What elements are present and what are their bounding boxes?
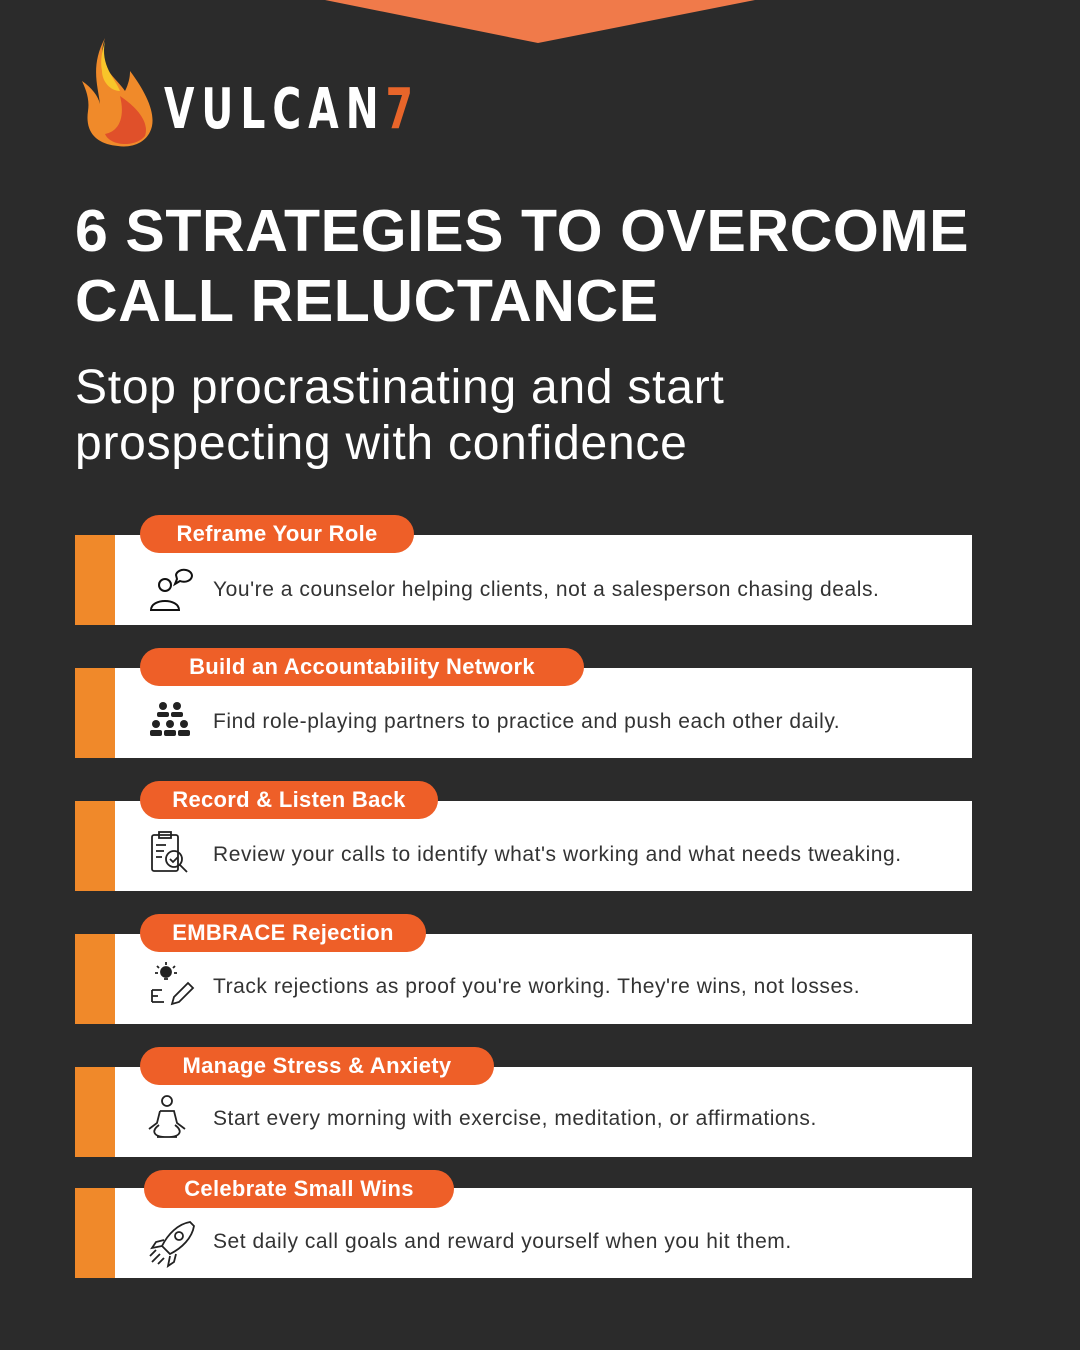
pill title: Record & Listen Back: [172, 787, 406, 812]
icon: rocket: [149, 1221, 195, 1268]
pill title: Build an Accountability Network: [189, 654, 535, 679]
title: [75, 198, 969, 334]
pill title: Celebrate Small Wins: [184, 1176, 414, 1201]
panel: network: [75, 648, 972, 758]
pill title: [140, 914, 426, 952]
pill title: Manage Stress & Anxiety: [183, 1053, 451, 1078]
logo text: VULCAN7: [164, 77, 420, 142]
text: Review your calls to identify what's working and what needs tweaking.: [213, 843, 902, 866]
text: Find role-playing partners to practice and push each other daily.: [213, 710, 840, 733]
icon: person speech: [150, 568, 193, 611]
pill title: Reframe Your Role: [176, 521, 378, 546]
icon: group: [150, 702, 190, 736]
text: You're a counselor helping clients, not a salesperson chasing deals.: [213, 578, 879, 601]
icon: clipboard search: [151, 831, 188, 873]
pill title: [140, 781, 438, 819]
panel: reframe: [75, 515, 972, 625]
panel: rejection: [75, 914, 972, 1024]
icon: idea pencil: [151, 962, 194, 1006]
title: 6 STRATEGIES TO OVERCOME: [75, 198, 969, 264]
text: Track rejections as proof you're working. They're wins, not losses.: [213, 975, 860, 998]
pill title: [140, 648, 584, 686]
pill title: [140, 1047, 494, 1085]
text: Start every morning with exercise, meditation, or affirmations.: [213, 1107, 817, 1130]
pill title: EMBRACE Rejection: [172, 920, 394, 945]
subtitle: Stop procrastinating and start: [75, 361, 725, 414]
title: CALL RELUCTANCE: [75, 268, 659, 334]
panel: record: [75, 781, 972, 891]
icon: flame: [82, 38, 152, 146]
pill title: [144, 1170, 454, 1208]
panel: wins: [75, 1170, 972, 1278]
top banner: [325, 0, 755, 43]
text: Set daily call goals and reward yourself when you hit them.: [213, 1230, 792, 1253]
subtitle: prospecting with confidence: [75, 417, 688, 470]
pill title: [140, 515, 414, 553]
logo: [82, 38, 420, 146]
icon: meditation: [148, 1095, 186, 1138]
subtitle: [75, 361, 725, 470]
panel: stress: [75, 1047, 972, 1157]
